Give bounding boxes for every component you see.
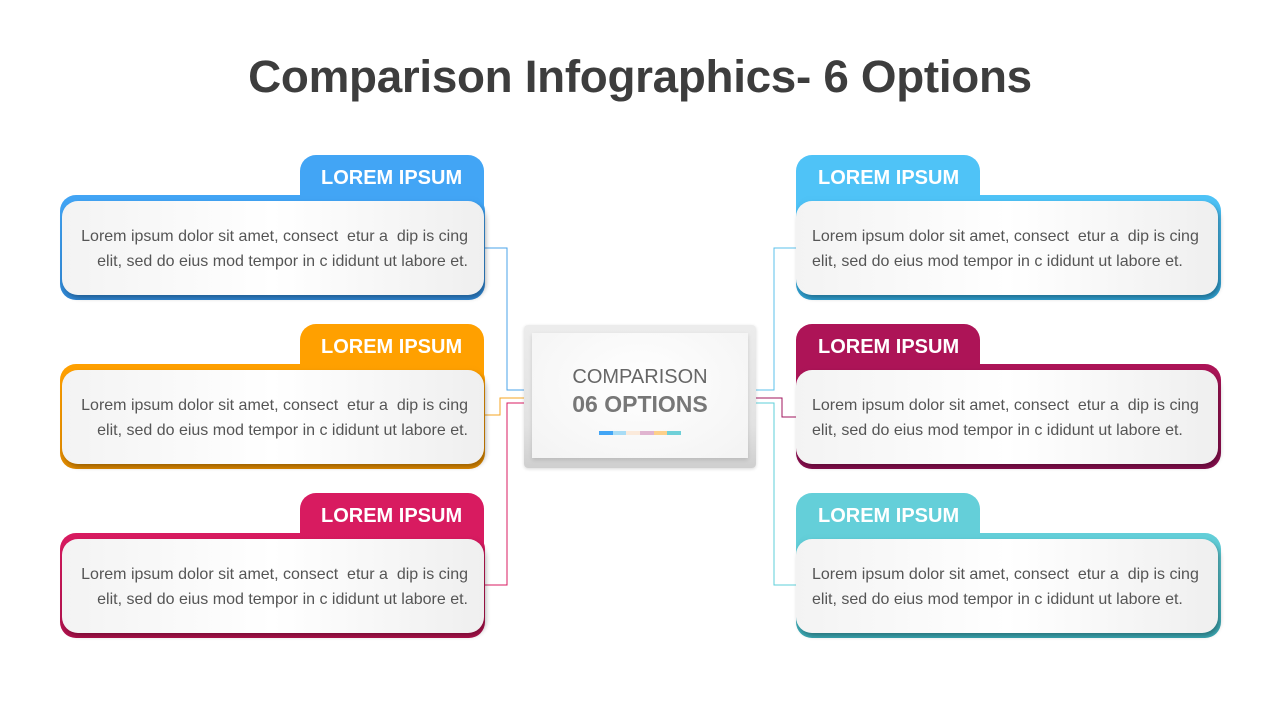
text 2 — [62, 370, 484, 464]
text 3: Lorem ipsum dolor sit amet, consect etur a dip is cing — [81, 566, 468, 583]
tab heading 2 — [300, 324, 484, 384]
text 5: elit, sed do eius mod tempor in c ididunt ut labore et. — [812, 422, 1183, 439]
tab heading 3 — [300, 493, 484, 553]
tab heading 4: LOREM IPSUM — [818, 167, 959, 189]
text 2: elit, sed do eius mod tempor in c ididunt ut labore et. — [97, 422, 468, 439]
text 1: Lorem ipsum dolor sit amet, consect etur a dip is cing — [81, 228, 468, 245]
text 6: Lorem ipsum dolor sit amet, consect etur a dip is cing — [812, 566, 1199, 583]
tab heading 6: LOREM IPSUM — [818, 505, 959, 527]
text 4: elit, sed do eius mod tempor in c ididunt ut labore et. — [812, 253, 1183, 270]
text 6 — [796, 539, 1218, 633]
center text — [572, 366, 708, 417]
center text: 06 OPTIONS — [572, 391, 708, 417]
tab heading 1 — [300, 155, 484, 215]
text 5: Lorem ipsum dolor sit amet, consect etur a dip is cing — [812, 397, 1199, 414]
text 1 — [62, 201, 484, 295]
color strip — [599, 431, 681, 435]
tab heading 6 — [796, 493, 980, 553]
text 3 — [62, 539, 484, 633]
text 6: elit, sed do eius mod tempor in c ididunt ut labore et. — [812, 591, 1183, 608]
text 1: elit, sed do eius mod tempor in c ididunt ut labore et. — [97, 253, 468, 270]
panel: option 3 — [60, 493, 489, 639]
tab heading 4 — [796, 155, 980, 215]
tab heading 5: LOREM IPSUM — [818, 336, 959, 358]
tab heading 2: LOREM IPSUM — [321, 336, 462, 358]
panel: option 2 — [60, 324, 489, 470]
text 4: Lorem ipsum dolor sit amet, consect etur a dip is cing — [812, 228, 1199, 245]
text 4 — [796, 201, 1218, 295]
panel: option 6 — [795, 493, 1223, 639]
panel: option 4 — [795, 155, 1223, 301]
tab heading 3: LOREM IPSUM — [321, 505, 462, 527]
tab heading 1: LOREM IPSUM — [321, 167, 462, 189]
text 3: elit, sed do eius mod tempor in c ididunt ut labore et. — [97, 591, 468, 608]
text 2: Lorem ipsum dolor sit amet, consect etur a dip is cing — [81, 397, 468, 414]
tab heading 5 — [796, 324, 980, 384]
panel: option 1 — [60, 155, 489, 301]
text 5 — [796, 370, 1218, 464]
title: Comparison Infographics- 6 Options — [248, 51, 1032, 102]
center box — [524, 325, 756, 468]
panel: option 5 — [795, 324, 1223, 470]
center text: COMPARISON — [572, 366, 708, 388]
